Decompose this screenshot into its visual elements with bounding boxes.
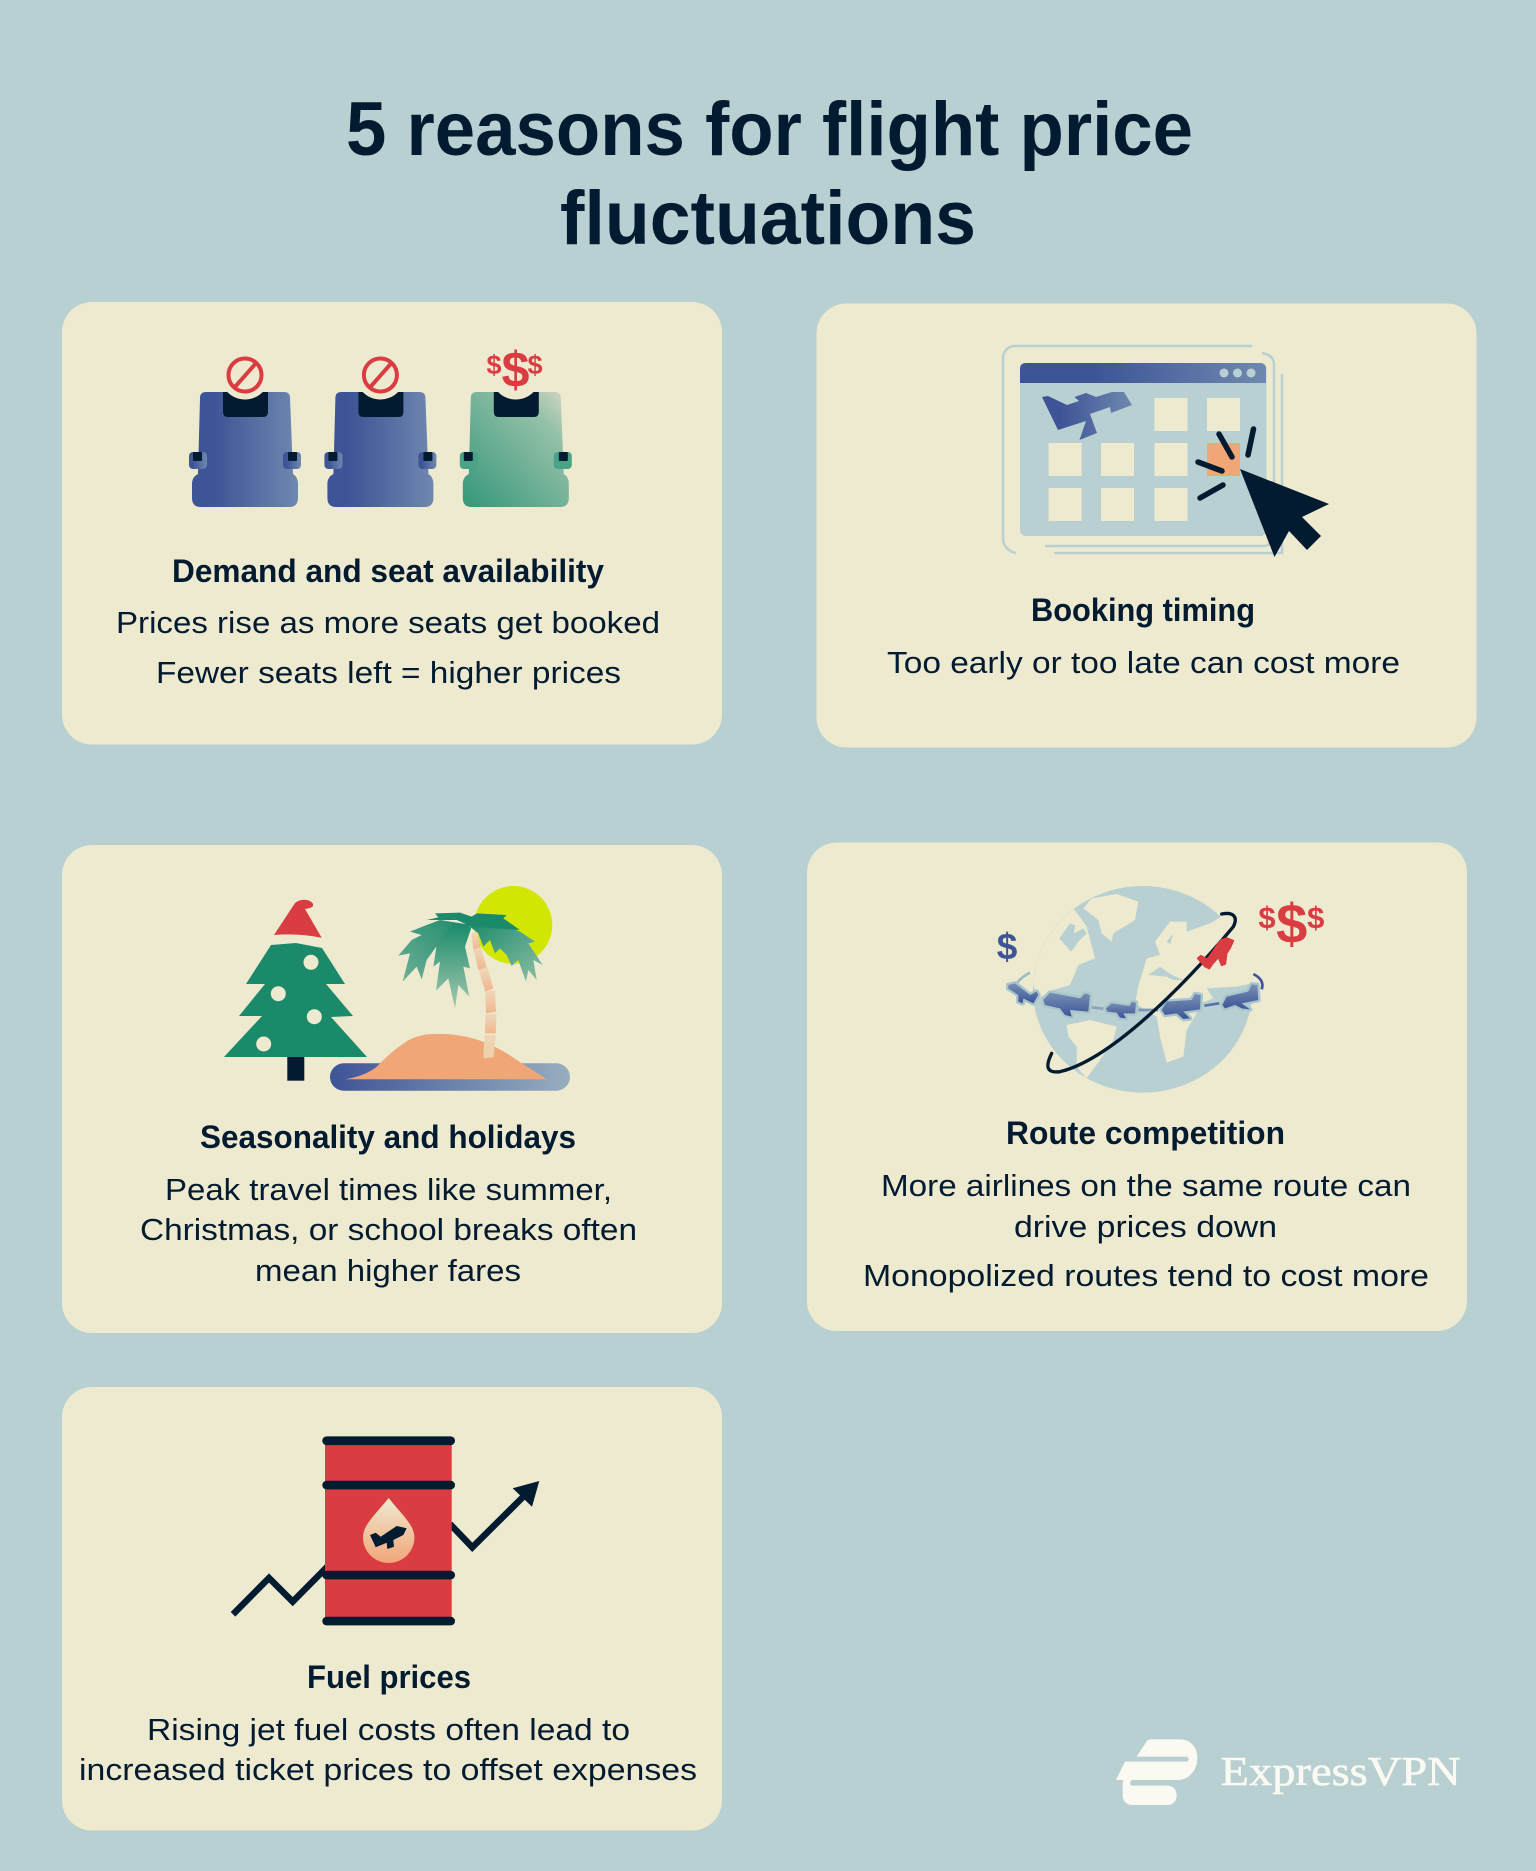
panel: seasonality and holidays bbox=[62, 845, 722, 1333]
panel: demand and seat availability bbox=[62, 302, 722, 744]
body text: Too early or too late can cost more bbox=[887, 645, 1400, 680]
icon: dollar signs: $ bbox=[486, 350, 502, 380]
heading: Demand and seat availability bbox=[172, 553, 604, 589]
heading: Route competition bbox=[1006, 1115, 1285, 1151]
seat 1 taken bbox=[189, 350, 301, 507]
body text: More airlines on the same route can bbox=[881, 1168, 1411, 1203]
globe bbox=[1033, 886, 1252, 1093]
body text: Rising jet fuel costs often lead to bbox=[147, 1712, 630, 1747]
route dashes bbox=[1017, 973, 1262, 1010]
icon: christmas tree bbox=[224, 900, 367, 1081]
body text: Monopolized routes tend to cost more bbox=[863, 1258, 1429, 1293]
title: 5 reasons for flight price bbox=[346, 87, 1193, 172]
icon: booking window with cursor bbox=[1003, 346, 1329, 557]
icon: three airplane seats bbox=[189, 342, 572, 507]
icon: fuel barrel bbox=[322, 1436, 455, 1625]
icon: globe with planes and route bbox=[1008, 886, 1262, 1093]
body text: Fewer seats left = higher prices bbox=[156, 655, 621, 690]
body text bbox=[116, 605, 660, 690]
icon: high price dollars: $ bbox=[1307, 900, 1324, 935]
icon: dollar signs: $ bbox=[502, 342, 530, 398]
heading: Fuel prices bbox=[307, 1659, 471, 1695]
red plane bbox=[1198, 938, 1233, 969]
logo: ExpressVPN: ExpressVPN bbox=[1221, 1748, 1461, 1794]
body text bbox=[79, 1712, 697, 1787]
panel: booking timing bbox=[816, 304, 1476, 748]
body text bbox=[863, 1168, 1429, 1293]
panel: route competition bbox=[807, 842, 1467, 1331]
body text: Christmas, or school breaks often bbox=[140, 1212, 637, 1247]
icon: dollar signs bbox=[486, 342, 543, 398]
heading: Seasonality and holidays bbox=[200, 1119, 576, 1155]
icon: rising price arrow bbox=[233, 1481, 539, 1614]
logo: ExpressVPN bbox=[1116, 1739, 1461, 1805]
blue planes bbox=[1008, 983, 1258, 1019]
body text: drive prices down bbox=[1014, 1209, 1277, 1244]
body text bbox=[140, 1172, 637, 1288]
icon: low price dollar: $ bbox=[997, 926, 1018, 967]
heading: Booking timing bbox=[1031, 592, 1255, 628]
seat 3 available with price bbox=[460, 350, 572, 507]
icon: high price dollars bbox=[1258, 892, 1324, 955]
icon: palm island with sun bbox=[330, 886, 570, 1091]
orbit route bbox=[1048, 913, 1235, 1072]
title: fluctuations bbox=[560, 176, 976, 261]
panel: fuel prices bbox=[62, 1387, 722, 1830]
icon: high price dollars: $ bbox=[1276, 892, 1307, 955]
body text: mean higher fares bbox=[255, 1253, 521, 1288]
body text: increased ticket prices to offset expenses bbox=[79, 1752, 697, 1787]
icon: dollar signs: $ bbox=[527, 350, 543, 380]
icon: high price dollars: $ bbox=[1258, 900, 1276, 935]
seat 2 taken bbox=[324, 350, 436, 507]
body text: Peak travel times like summer, bbox=[165, 1172, 612, 1207]
body text: Prices rise as more seats get booked bbox=[116, 605, 660, 640]
title bbox=[346, 87, 1193, 261]
